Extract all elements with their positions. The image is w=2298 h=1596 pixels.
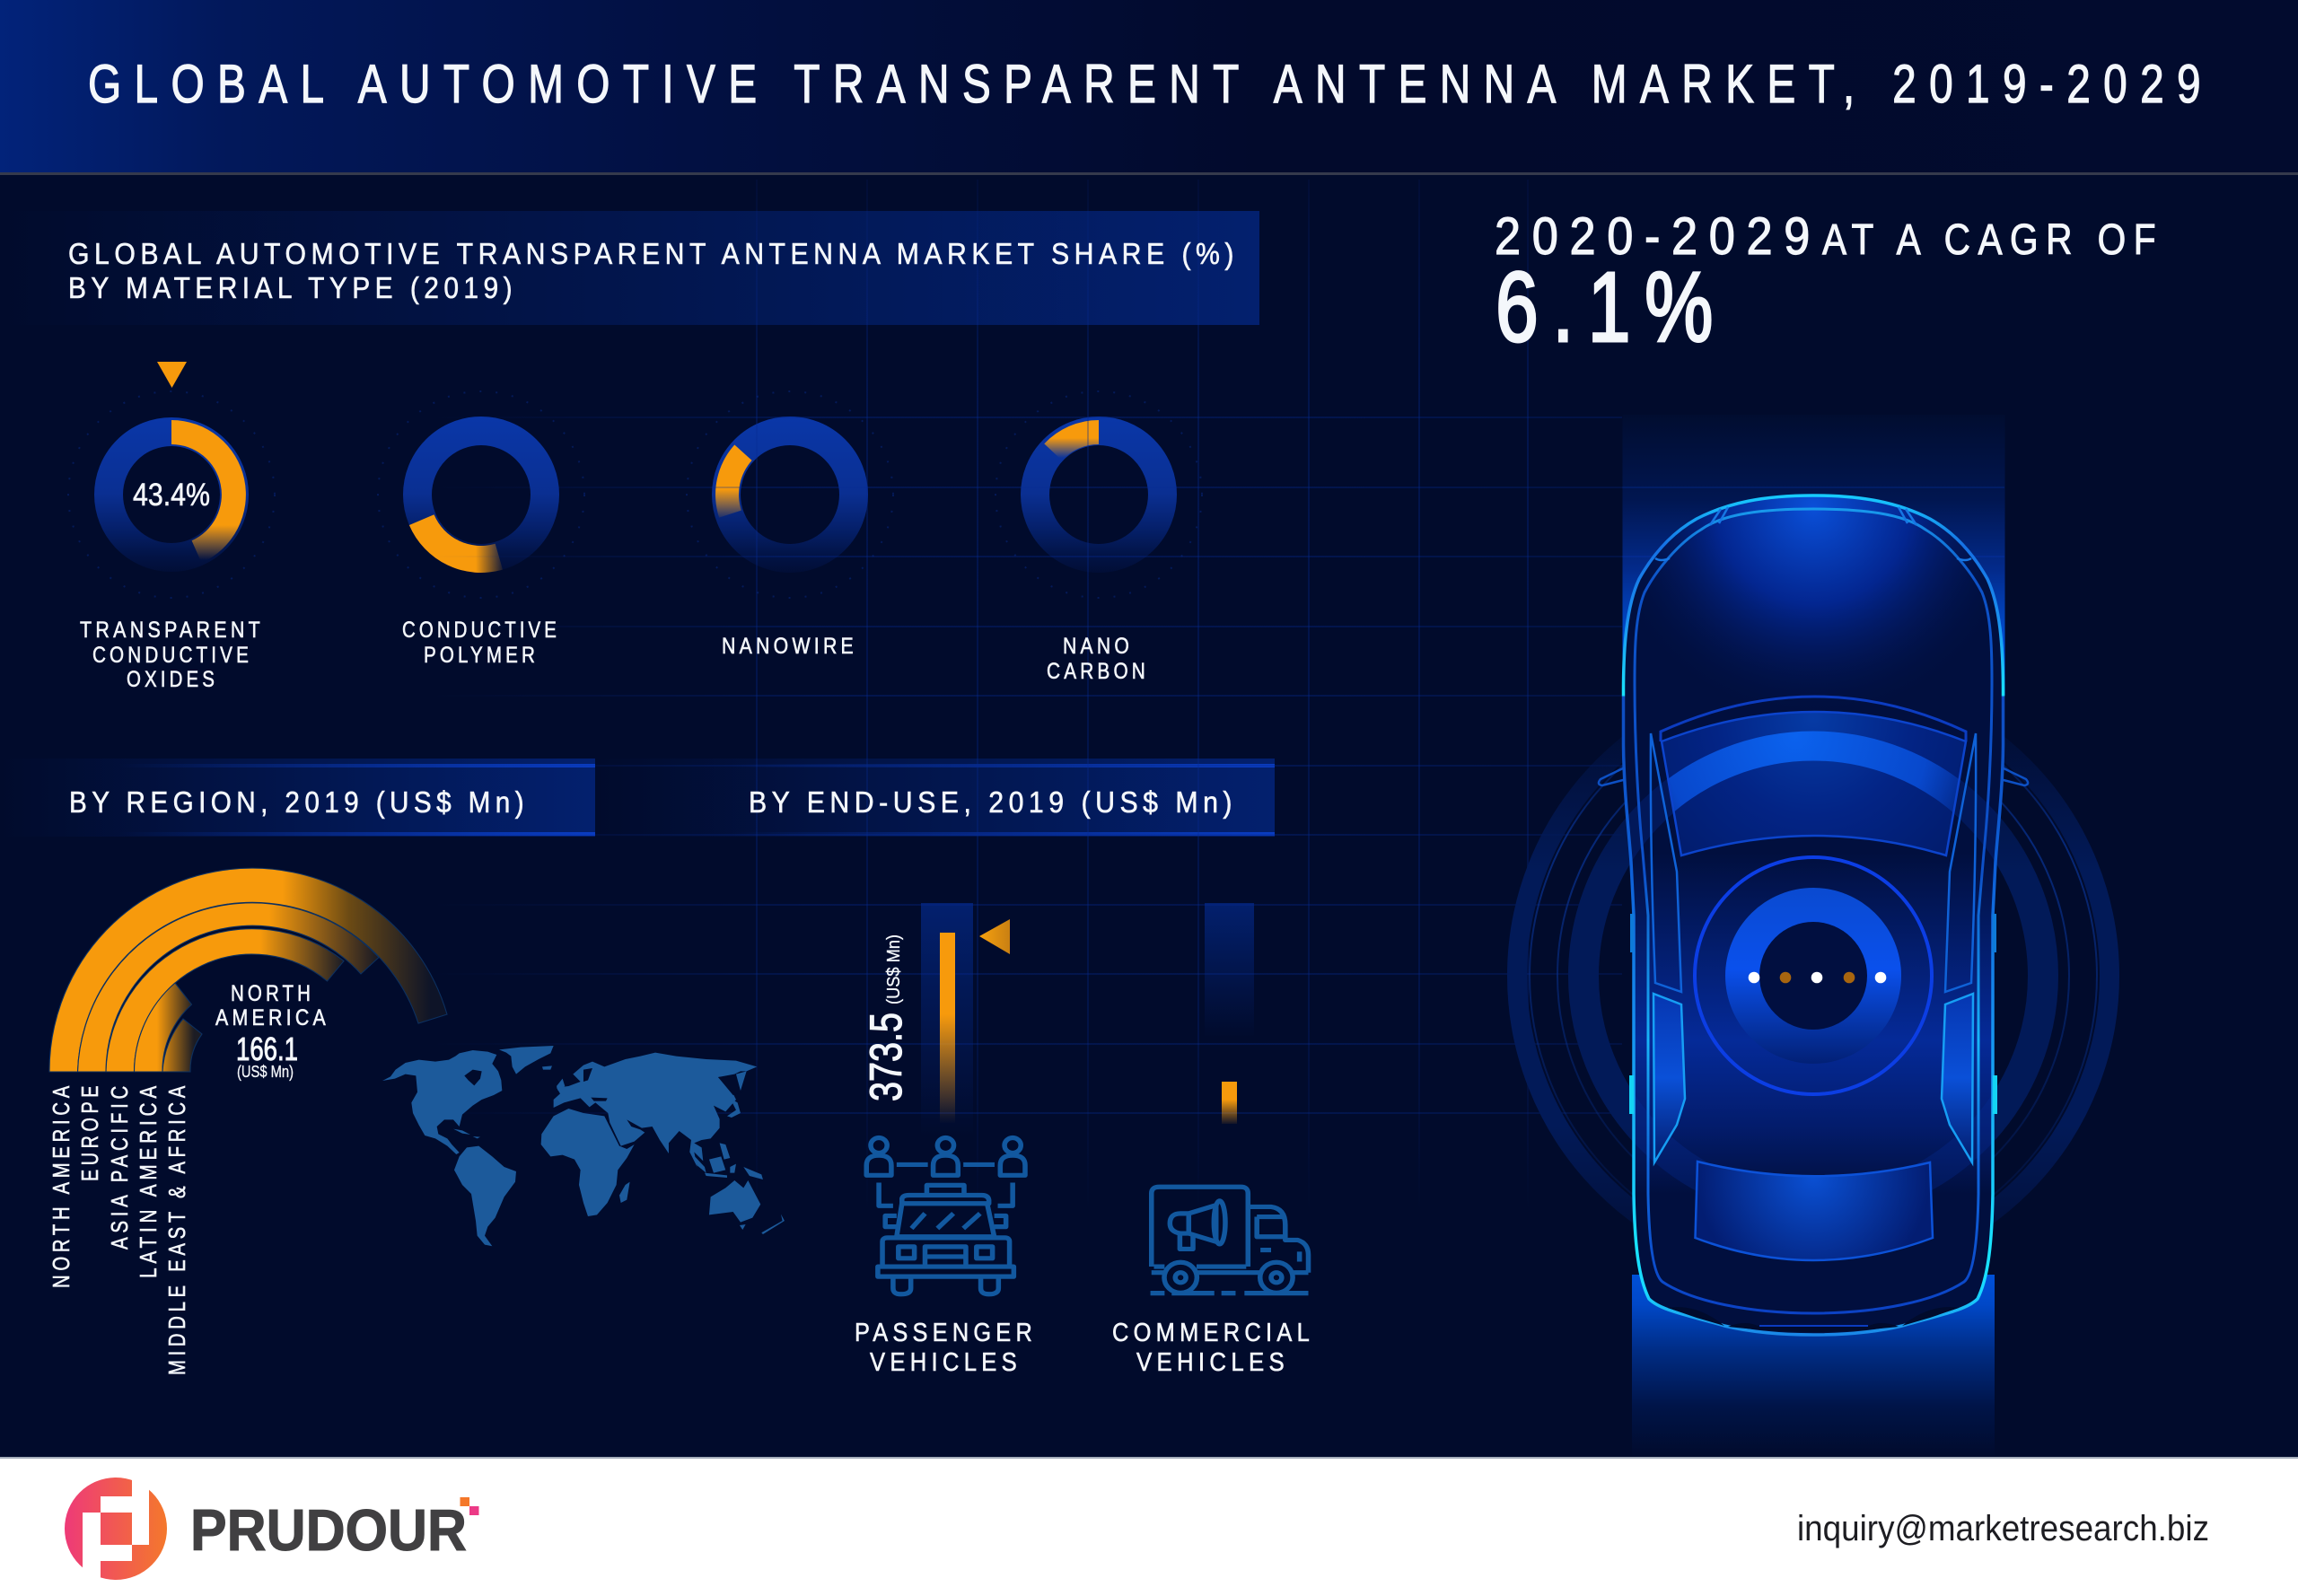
africa <box>541 1109 635 1216</box>
label: nanowire: NANOWIRE <box>722 634 857 659</box>
region axis labels: ASIA PACIFIC <box>106 1082 133 1250</box>
CAGR callout: AT A CAGR OF <box>1822 216 2163 264</box>
rear side window left <box>1653 994 1685 1162</box>
arc: middle east and africa <box>162 1019 202 1072</box>
marker triangle <box>157 362 187 388</box>
region axis labels: EUROPE <box>76 1082 103 1181</box>
indicator dots <box>1749 972 1886 983</box>
side mirrors <box>1599 767 2028 785</box>
indonesia and philippines <box>691 1143 763 1179</box>
britain <box>557 1079 565 1091</box>
region axis labels: NORTH AMERICA <box>48 1082 75 1288</box>
rear bumper detail <box>1668 1307 1959 1332</box>
label: nano carbon <box>1047 634 1149 684</box>
contact email: inquiry@marketresearch.biz <box>1797 1509 2209 1548</box>
label: transparent conductive oxides: TRANSPARENT <box>80 618 264 643</box>
car outer outline <box>1623 495 2004 1335</box>
arc: asia pacific <box>106 929 344 1072</box>
section heading: by end-use: BY END-USE, 2019 (US$ Mn) <box>749 785 1237 819</box>
label: conductive polymer <box>402 618 560 668</box>
donut chart: transparent conductive oxides <box>68 391 275 598</box>
label: passenger vehicles: PASSENGER <box>855 1319 1037 1347</box>
heading band: region <box>0 759 595 837</box>
value: passenger vehicles: 373.5 <box>861 1013 911 1101</box>
bar background: passenger <box>921 903 973 1136</box>
icon: commercial vehicle <box>1151 1187 1309 1293</box>
region arc chart <box>49 868 447 1072</box>
eurasia <box>554 1053 757 1167</box>
rear side window right <box>1942 994 1973 1162</box>
label: transparent conductive oxides: OXIDES <box>127 667 218 692</box>
glow rectangle below car <box>1632 1275 1995 1458</box>
arc: europe <box>77 903 379 1072</box>
new zealand <box>761 1215 785 1234</box>
logo squares <box>460 1497 479 1515</box>
donut chart: conductive polymer <box>378 391 584 598</box>
donut chart: nanowire <box>687 391 893 598</box>
north america callout: AMERICA <box>215 1005 329 1030</box>
value: passenger vehicles <box>861 934 911 1101</box>
label: transparent conductive oxides <box>80 618 264 692</box>
label: commercial vehicles <box>1112 1319 1314 1377</box>
rear window <box>1695 1162 1933 1260</box>
label: nano carbon: NANO <box>1063 634 1133 659</box>
label: conductive polymer: CONDUCTIVE <box>402 618 560 643</box>
car illustration <box>1517 415 2109 1458</box>
arc: north america <box>49 868 447 1072</box>
greenland <box>499 1046 554 1074</box>
label: passenger vehicles: VEHICLES <box>870 1348 1022 1377</box>
north america callout: (US$ Mn) <box>237 1063 294 1081</box>
caribbean <box>453 1129 480 1138</box>
footer <box>0 1457 2298 1596</box>
bar: passenger vehicles <box>940 933 955 1123</box>
south america <box>454 1146 516 1246</box>
north america callout <box>215 981 329 1081</box>
world map <box>382 1046 785 1246</box>
north america callout: 166.1 <box>236 1030 298 1067</box>
north america <box>382 1050 502 1154</box>
bar background: commercial <box>1205 903 1254 1038</box>
icon: passenger vehicle <box>866 1137 1025 1294</box>
side lights <box>1629 914 1997 1114</box>
label: commercial vehicles: VEHICLES <box>1136 1348 1289 1377</box>
section heading: material type <box>68 237 1239 304</box>
hudson bay and inland seas <box>464 1068 743 1101</box>
madagascar <box>619 1182 630 1203</box>
side pillars and front side windows <box>1651 733 1976 992</box>
logo wordmark: PRUDOUR <box>190 1497 467 1563</box>
region axis labels: MIDDLE EAST & AFRICA <box>163 1082 190 1375</box>
kamchatka and japan <box>727 1071 747 1118</box>
heading band: material type <box>0 211 1259 325</box>
iceland <box>542 1065 552 1070</box>
label: commercial vehicles: COMMERCIAL <box>1112 1319 1314 1347</box>
logo mark <box>65 1472 167 1580</box>
windshield <box>1659 695 1968 857</box>
roof strip details <box>1655 507 1971 560</box>
grid over top glow <box>1622 487 2004 557</box>
tasmania <box>740 1224 746 1230</box>
value: 43.4%: 43.4% <box>133 478 210 513</box>
label: conductive polymer: POLYMER <box>424 643 539 668</box>
sunroof disc <box>1695 857 1932 1094</box>
section heading: material type: GLOBAL AUTOMOTIVE TRANSPARENT ANTENNA MARKET SHARE (%) <box>68 237 1239 270</box>
marker triangle: passenger <box>979 919 1010 954</box>
region axis labels <box>48 1082 190 1375</box>
bar: commercial vehicles <box>1222 1082 1237 1124</box>
donut chart: nano carbon <box>996 391 1202 598</box>
section heading: material type: BY MATERIAL TYPE (2019) <box>68 271 517 304</box>
value: passenger vehicles: (US$ Mn) <box>884 934 904 1004</box>
label: nano carbon: CARBON <box>1047 659 1149 684</box>
header bar <box>0 0 2298 172</box>
glow rectangle above car <box>1623 415 2005 696</box>
australia <box>709 1180 760 1223</box>
CAGR callout <box>1495 207 2163 363</box>
radar rings <box>1517 680 2109 1272</box>
label: passenger vehicles <box>855 1319 1037 1377</box>
car inner outline <box>1635 509 1992 1313</box>
car body <box>1625 497 2002 1334</box>
region axis labels: LATIN AMERICA <box>135 1082 162 1278</box>
arc: latin america <box>135 983 192 1072</box>
north america callout: NORTH <box>231 981 314 1006</box>
heading band: end-use <box>595 759 1275 837</box>
label: transparent conductive oxides: CONDUCTIVE <box>92 643 252 668</box>
section heading: by region: BY REGION, 2019 (US$ Mn) <box>69 785 529 819</box>
CAGR callout: 6.1% <box>1495 252 1727 363</box>
CAGR callout: 2020-2029 <box>1495 207 1821 266</box>
